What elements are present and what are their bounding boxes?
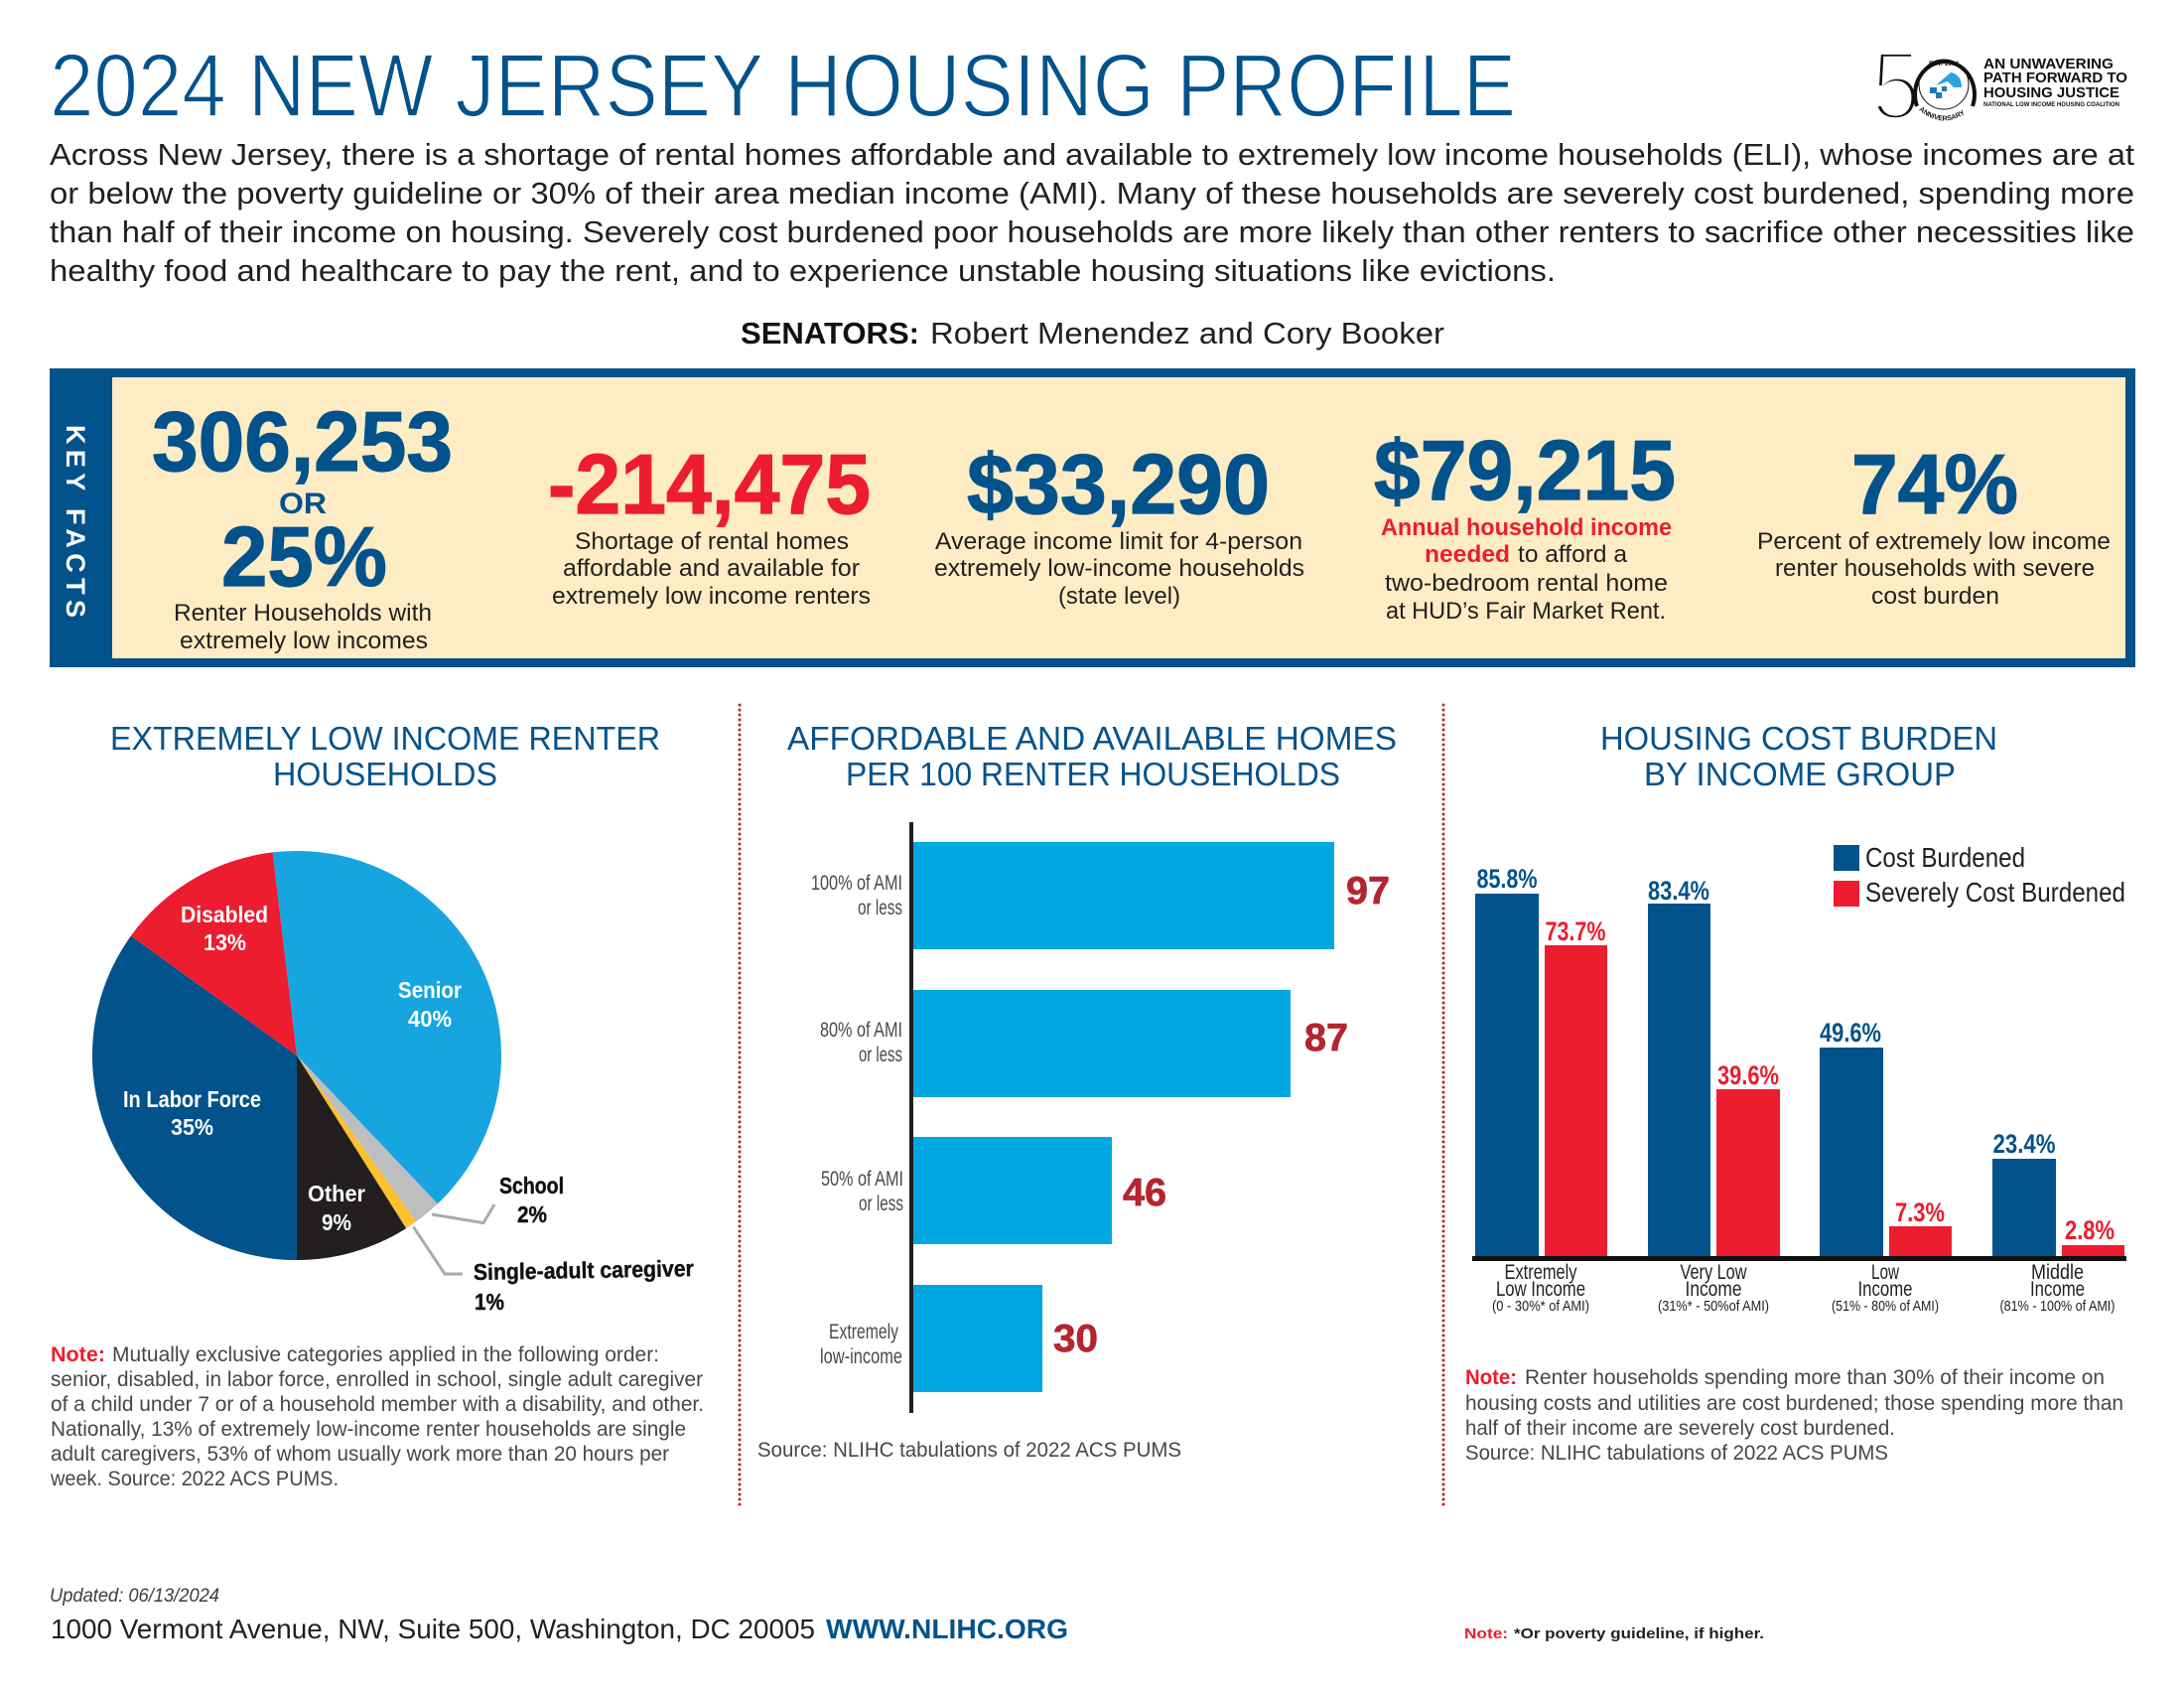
note: pie chart: senior, disabled, in labor force, enrolled in school, single adult caregiver: [51, 1368, 703, 1391]
column chart: (51% - 80% of AMI): [1832, 1298, 1939, 1315]
bar chart: 80% of AMI: [820, 1019, 902, 1042]
column chart: 23.4%: [1993, 1129, 2055, 1159]
pie chart: 13%: [204, 929, 246, 955]
logo: 50th anniversary: [1871, 31, 2127, 140]
logo: 50th anniversary: 5: [1871, 31, 1921, 140]
fact: shortage: [548, 438, 871, 610]
panel: housing cost burden: [1465, 720, 2126, 1465]
note: pie chart: [50, 1343, 704, 1490]
note: column chart: Renter households spending more than 30% of their income on: [1525, 1366, 2105, 1389]
pie chart: 35%: [171, 1114, 213, 1140]
note: column chart: Source: NLIHC tabulations of 2022 ACS PUMS: [1465, 1442, 1888, 1465]
fact: severe cost burden: [1757, 438, 2111, 610]
fact: income limit: $33,290: [967, 438, 1270, 532]
fact: renter households: extremely low incomes: [180, 628, 428, 654]
note: pie chart: Note:: [51, 1343, 105, 1366]
bar chart: 97: [1346, 870, 1390, 913]
column chart: (31%* - 50%of AMI): [1658, 1298, 1769, 1315]
panel: key facts: [50, 368, 2135, 667]
bar chart: or less: [859, 1044, 902, 1066]
heading: pie chart: [110, 720, 660, 792]
note: column chart: housing costs and utilities are cost burdened; those spending more than: [1465, 1392, 2123, 1415]
pie chart: [92, 851, 501, 1260]
pie chart: Other: [308, 1181, 365, 1206]
column chart: Middle: [2031, 1261, 2084, 1284]
column chart: 2.8%: [2065, 1215, 2115, 1245]
pie chart: 9%: [322, 1209, 351, 1235]
callout: single-adult caregiver: [413, 1227, 694, 1315]
footer: address and website: WWW.NLIHC.ORG: [826, 1614, 1068, 1644]
bar chart: 30: [1053, 1318, 1098, 1360]
heading: bar chart: PER 100 RENTER HOUSEHOLDS: [846, 756, 1340, 792]
logo: 50th anniversary: NATIONAL LOW INCOME HOUSING COALITION: [1983, 102, 2119, 108]
heading: column chart: BY INCOME GROUP: [1644, 756, 1956, 792]
fact: renter households: 25%: [221, 510, 387, 605]
column chart: 7.3%: [1895, 1197, 1945, 1227]
legend: [1834, 842, 2125, 908]
panel: affordable and available homes: [757, 720, 1397, 1462]
logo: 50th anniversary: EST. 1974: [1929, 61, 1959, 68]
pie chart: Senior: [398, 977, 462, 1003]
fact: income needed: $79,215: [1374, 424, 1676, 518]
column chart: (81% - 100% of AMI): [1999, 1298, 2115, 1315]
fact: shortage: extremely low income renters: [552, 583, 871, 610]
fact: income limit: extremely low-income households: [934, 555, 1304, 582]
intro paragraph: than half of their income on housing. Severely cost burdened poor households are more likely than other renters to sacrifice other necessities like: [50, 214, 2134, 249]
fact: income needed: two-bedroom rental home: [1385, 570, 1668, 597]
bar chart: 100% of AMI: [811, 872, 902, 895]
bar chart: or less: [858, 897, 902, 919]
fact: severe cost burden: cost burden: [1871, 583, 1999, 610]
fact: renter households: [152, 395, 453, 654]
column chart: (0 - 30%* of AMI): [1492, 1298, 1589, 1315]
logo: 50th anniversary: ANNIVERSARY: [1919, 107, 1964, 121]
pie chart: 40%: [408, 1006, 452, 1032]
senators line: Robert Menendez and Cory Booker: [930, 316, 1444, 351]
intro paragraph: healthy food and healthcare to pay the rent, and to experience unstable housing situations like evictions.: [50, 253, 1556, 288]
footer: poverty guideline note: *Or poverty guideline, if higher.: [1514, 1625, 1764, 1642]
fact: shortage: -214,475: [548, 438, 871, 532]
fact: income limit: Average income limit for 4-person: [935, 528, 1302, 555]
heading: bar chart: AFFORDABLE AND AVAILABLE HOMES: [787, 720, 1397, 757]
heading: pie chart: HOUSEHOLDS: [273, 756, 497, 792]
key facts side label: KEY FACTS: [61, 425, 90, 618]
callout: single-adult caregiver: Single-adult caregiver: [474, 1255, 694, 1285]
fact: income needed: Annual household income: [1381, 514, 1672, 541]
bar chart: 46: [1123, 1172, 1166, 1214]
note: pie chart: of a child under 7 or of a household member with a disability, and other.: [51, 1393, 704, 1416]
fact: income needed: at HUD’s Fair Market Rent.: [1386, 598, 1666, 625]
column chart: 39.6%: [1717, 1060, 1779, 1090]
bar chart: or less: [859, 1193, 903, 1215]
column chart: [1472, 864, 2126, 1315]
bar chart: low-income: [820, 1345, 902, 1368]
legend: Severely Cost Burdened: [1865, 877, 2125, 908]
fact: income needed: [1374, 424, 1676, 625]
note: column chart: [1465, 1366, 2123, 1465]
intro paragraph: or below the poverty guideline or 30% of their area median income (AMI). Many of these households are severely cost burdened, spending more: [50, 176, 2134, 211]
footer: updated date: Updated: 06/13/2024: [50, 1586, 219, 1607]
senators line: SENATORS:: [741, 316, 919, 351]
note: pie chart: adult caregivers, 53% of whom usually work more than 20 hours per: [51, 1443, 669, 1466]
callout: school: [432, 1173, 564, 1227]
fact: renter households: OR: [279, 488, 327, 520]
note: pie chart: Nationally, 13% of extremely low-income renter households are single: [51, 1418, 686, 1441]
title: 2024 NEW JERSEY HOUSING PROFILE: [50, 37, 1516, 136]
legend: Cost Burdened: [1865, 842, 2025, 873]
column chart: Very Low: [1680, 1261, 1747, 1284]
column chart: Income: [1686, 1278, 1741, 1301]
fact: severe cost burden: Percent of extremely low income: [1757, 528, 2111, 555]
footer: poverty guideline note: Note:: [1464, 1625, 1508, 1642]
fact: severe cost burden: 74%: [1851, 438, 2018, 532]
fact: shortage: Shortage of rental homes: [575, 528, 849, 555]
callout: school: School: [499, 1173, 564, 1198]
column chart: Low: [1871, 1261, 1900, 1284]
logo: 50th anniversary: PATH FORWARD TO: [1983, 70, 2127, 86]
logo: 50th anniversary: HOUSING JUSTICE: [1983, 84, 2119, 101]
column chart: 85.8%: [1477, 864, 1537, 894]
heading: column chart: HOUSING COST BURDEN: [1600, 720, 1997, 757]
intro paragraph: Across New Jersey, there is a shortage of rental homes affordable and available to extremely low income households (ELI), whose incomes are at: [50, 137, 2134, 172]
fact: income needed: needed: [1425, 541, 1510, 568]
column chart: 83.4%: [1648, 876, 1709, 906]
column chart: Extremely: [1505, 1261, 1577, 1284]
column chart: 49.6%: [1820, 1018, 1881, 1048]
fact: shortage: affordable and available for: [563, 555, 860, 582]
column chart: Income: [2030, 1278, 2085, 1301]
fact: renter households: Renter Households with: [174, 600, 432, 627]
logo: 50th anniversary: AN UNWAVERING: [1983, 56, 2114, 72]
fact: income needed: to afford a: [1518, 541, 1628, 568]
callout: school: 2%: [517, 1201, 547, 1227]
bar chart: 87: [1304, 1017, 1348, 1059]
bar chart: Extremely: [829, 1321, 898, 1343]
fact: income limit: [934, 438, 1304, 610]
heading: column chart: [1600, 720, 1997, 792]
fact: renter households: 306,253: [152, 395, 453, 490]
note: column chart: half of their income are severely cost burdened.: [1465, 1417, 1895, 1440]
column chart: Low Income: [1496, 1278, 1585, 1301]
note: pie chart: week. Source: 2022 ACS PUMS.: [50, 1468, 339, 1490]
senators line: [741, 316, 1444, 351]
source: bar chart: Source: NLIHC tabulations of 2022 ACS PUMS: [757, 1439, 1181, 1462]
bar chart: 50% of AMI: [821, 1168, 903, 1191]
column chart: Income: [1858, 1278, 1912, 1301]
note: pie chart: Mutually exclusive categories applied in the following order:: [112, 1343, 659, 1366]
panel: extremely low income renter households: [50, 720, 704, 1490]
pie chart: In Labor Force: [123, 1086, 261, 1112]
fact: income limit: (state level): [1058, 583, 1180, 610]
column chart: 73.7%: [1545, 916, 1606, 946]
fact: severe cost burden: renter households with severe: [1775, 555, 2095, 582]
callout: single-adult caregiver: 1%: [475, 1289, 504, 1315]
note: column chart: Note:: [1465, 1366, 1517, 1389]
heading: pie chart: EXTREMELY LOW INCOME RENTER: [110, 720, 660, 757]
footer: address and website: 1000 Vermont Avenue, NW, Suite 500, Washington, DC 20005: [51, 1614, 815, 1644]
heading: bar chart: [787, 720, 1397, 792]
intro paragraph: [50, 137, 2134, 288]
bar chart: [811, 822, 1390, 1413]
pie chart: Disabled: [181, 902, 268, 927]
